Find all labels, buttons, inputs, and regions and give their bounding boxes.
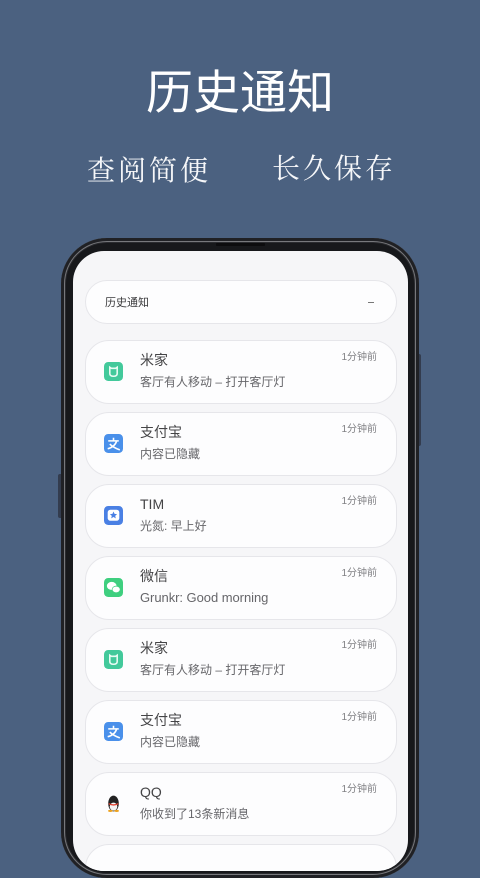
- header card: [85, 280, 397, 324]
- message: 光氮: 早上好: [140, 519, 207, 533]
- notification: partial next card: [85, 844, 397, 878]
- app name: 支付宝: [140, 424, 182, 440]
- time: 1分钟前: [341, 784, 377, 795]
- notification: Alipay repeat: [85, 700, 397, 764]
- notification: WeChat: [85, 556, 397, 620]
- icon: Alipay: [104, 722, 123, 741]
- notification: Mijia: [85, 340, 397, 404]
- volume button: [418, 354, 421, 446]
- speaker notch: [216, 243, 265, 246]
- notification: Mijia repeat: [85, 628, 397, 692]
- icon: WeChat: [104, 578, 123, 597]
- app name: QQ: [140, 784, 162, 800]
- title: 历史通知: [146, 66, 334, 119]
- phone screen: [73, 251, 408, 871]
- icon: Alipay: [104, 434, 123, 453]
- app name: TIM: [140, 496, 164, 512]
- icon: Mijia: [104, 650, 123, 669]
- side button: [58, 474, 62, 518]
- time: 1分钟前: [341, 712, 377, 723]
- icon: TIM: [104, 506, 123, 525]
- time: 1分钟前: [341, 640, 377, 651]
- header title: 历史通知: [105, 297, 149, 309]
- message: 客厅有人移动 – 打开客厅灯: [140, 375, 285, 389]
- time: 1分钟前: [341, 424, 377, 435]
- collapse dash: [368, 302, 374, 303]
- app name: 米家: [140, 352, 168, 368]
- subtitle: long-term storage: 长久保存: [272, 154, 396, 185]
- time: 1分钟前: [341, 568, 377, 579]
- app name: 支付宝: [140, 712, 182, 728]
- icon: Mijia: [104, 362, 123, 381]
- time: 1分钟前: [341, 496, 377, 507]
- message: Grunkr: Good morning: [140, 590, 268, 605]
- phone frame: [61, 238, 419, 878]
- notification: QQ: [85, 772, 397, 836]
- notification: Alipay: [85, 412, 397, 476]
- notification: TIM: [85, 484, 397, 548]
- icon: QQ penguin: [108, 796, 119, 812]
- app name: 米家: [140, 640, 168, 656]
- message: 客厅有人移动 – 打开客厅灯: [140, 663, 285, 677]
- time: 1分钟前: [341, 352, 377, 363]
- app name: 微信: [140, 568, 168, 584]
- message: 你收到了13条新消息: [140, 807, 249, 821]
- subtitle: easy to view: 查阅简便: [87, 156, 211, 187]
- message: 内容已隐藏: [140, 447, 200, 461]
- message: 内容已隐藏: [140, 735, 200, 749]
